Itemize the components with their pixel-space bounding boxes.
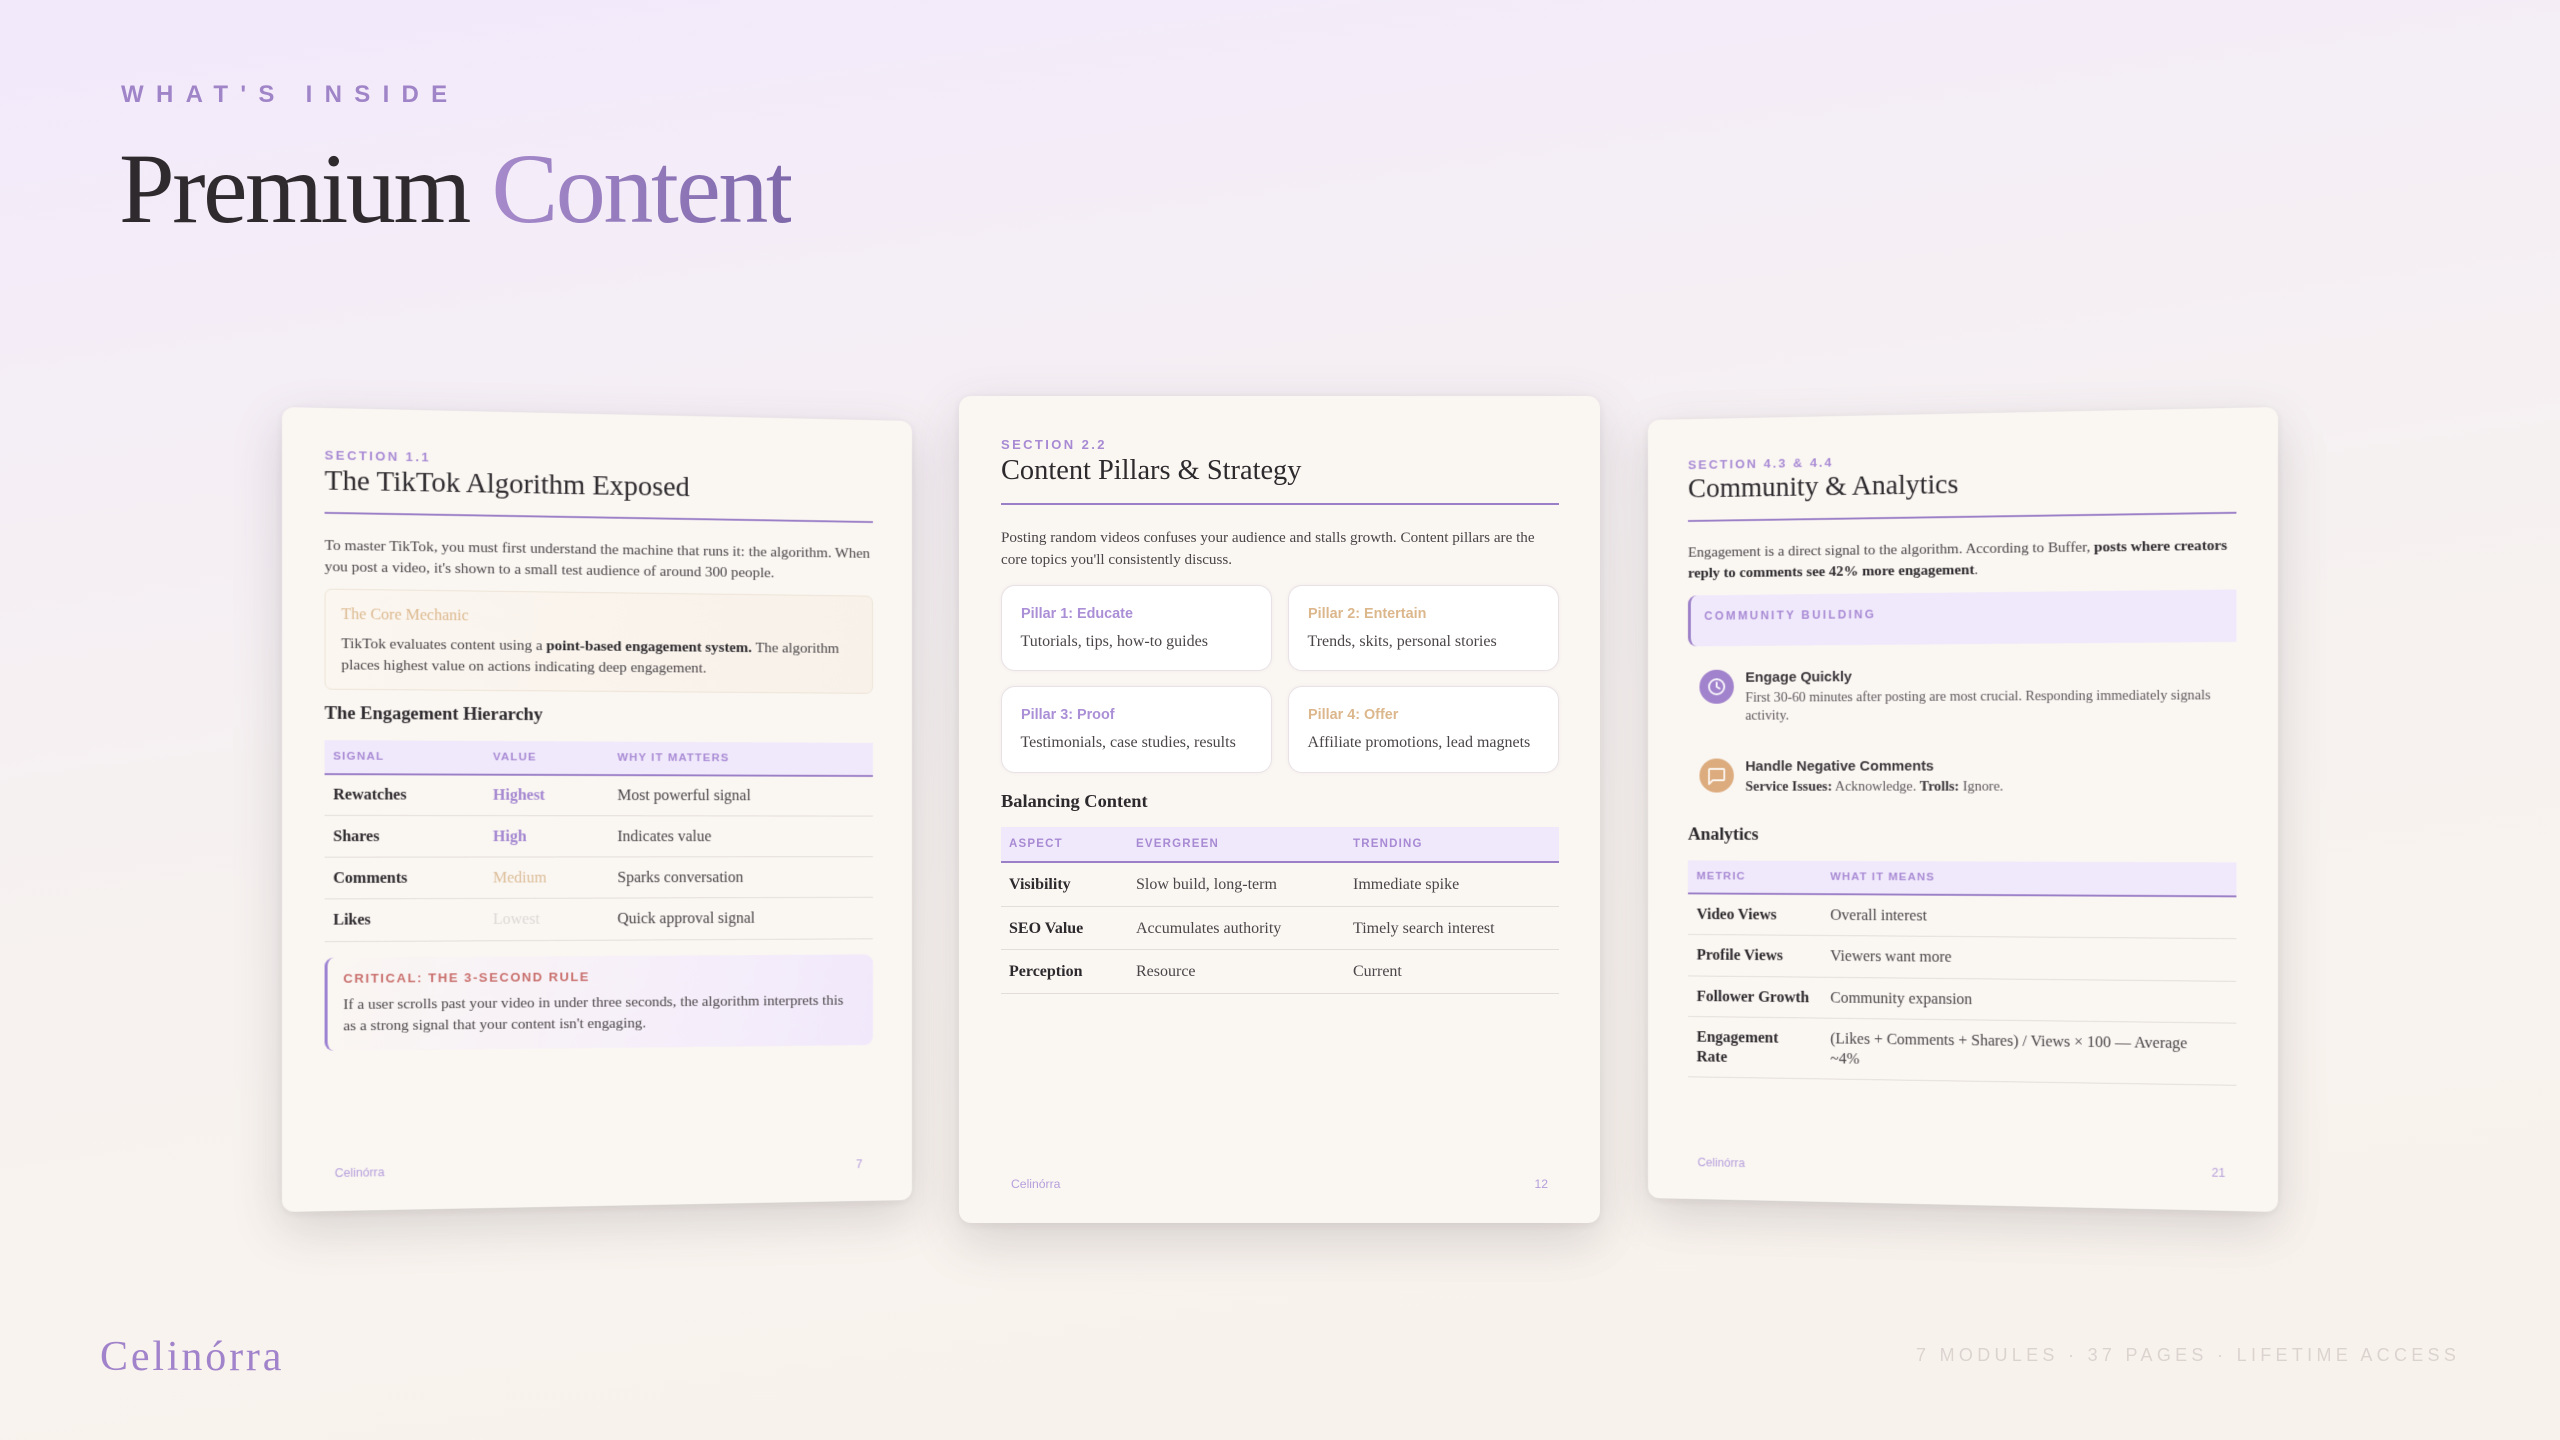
intro text: core topics you'll consistently discuss.	[1001, 551, 1232, 568]
intro text: To master TikTok, you must first understand the machine that runs it: the algorithm. When	[325, 537, 870, 561]
row: seo value: Timely search interest	[1353, 920, 1495, 937]
panel: page 21 community and analytics	[1648, 407, 2278, 1212]
intro text	[1688, 537, 2228, 582]
row: comments: Comments	[333, 870, 407, 887]
intro text: Posting random videos confuses your audience and stalls growth. Content pillars are the	[1001, 528, 1535, 546]
row: seo value: SEO Value	[1009, 920, 1083, 937]
footer logo: Celinórra	[100, 1334, 284, 1380]
row: engagement rate	[1688, 1016, 2236, 1085]
row: perception	[1001, 950, 1559, 994]
intro text	[324, 537, 870, 581]
panel: page 12 content pillars	[959, 396, 1600, 1223]
row: visibility	[1001, 863, 1559, 907]
row: likes: Quick approval signal	[617, 910, 755, 927]
card: pillar 2: Trends, skits, personal stories	[1308, 633, 1497, 650]
banner label: COMMUNITY BUILDING	[1704, 608, 1876, 623]
tip text: engage quickly: activity.	[1745, 708, 1789, 723]
section label: SECTION 2.2	[1001, 436, 1107, 452]
card: pillar 3: Pillar 3: Proof	[1021, 707, 1115, 723]
card: pillar 4: Affiliate promotions, lead magnets	[1308, 734, 1530, 751]
table header	[1001, 827, 1559, 863]
row: likes: Likes	[333, 912, 371, 929]
callout body: places highest value on actions indicating deep engagement.	[341, 657, 706, 676]
table header: ASPECT	[1009, 838, 1063, 850]
subheading: balancing content: Balancing Content	[1001, 791, 1148, 811]
card: pillar 1: Tutorials, tips, how-to guides	[1020, 633, 1208, 650]
row: rewatches	[325, 774, 873, 817]
row: visibility: Slow build, long-term	[1136, 876, 1277, 893]
row: profile views	[1688, 934, 2236, 981]
page heading: The TikTok Algorithm Exposed	[325, 465, 690, 503]
card: pillar 4: Pillar 4: Offer	[1308, 707, 1398, 723]
callout label: CRITICAL: THE 3-SECOND RULE	[343, 970, 590, 986]
card: pillar 4	[1288, 686, 1559, 773]
page heading: Content Pillars & Strategy	[1001, 455, 1301, 486]
table header: TRENDING	[1353, 838, 1423, 850]
footer brand: Celinórra	[1698, 1156, 1745, 1170]
callout title: The Core Mechanic	[341, 606, 469, 624]
row: follower growth	[1688, 976, 2236, 1023]
table header: EVERGREEN	[1136, 838, 1219, 850]
card: pillar 3: Testimonials, case studies, results	[1020, 734, 1236, 751]
subheading: engagement hierarchy: The Engagement Hierarchy	[325, 703, 543, 724]
row: engagement rate: ~4%	[1830, 1050, 1859, 1067]
page number: 7	[856, 1158, 862, 1171]
callout text	[343, 992, 844, 1035]
row: profile views: Viewers want more	[1830, 948, 1952, 965]
card: pillar 1	[1001, 585, 1272, 671]
callout text: If a user scrolls past your video in under three seconds, the algorithm interprets this	[343, 992, 843, 1013]
section label: SECTION 1.1	[325, 447, 431, 464]
card: pillar 1: Pillar 1: Educate	[1021, 606, 1133, 622]
callout: 3-second rule	[325, 954, 873, 1051]
row: rewatches: Rewatches	[333, 787, 407, 803]
section label: SECTION 4.3 & 4.4	[1688, 455, 1834, 472]
table header: WHY IT MATTERS	[617, 752, 729, 764]
callout text: as a strong signal that your content isn't engaging.	[343, 1015, 646, 1035]
row: comments: Sparks conversation	[617, 870, 743, 886]
title: Premium Content	[119, 133, 791, 244]
table header: VALUE	[493, 752, 537, 763]
page number: 12	[1534, 1177, 1548, 1191]
row: visibility: Immediate spike	[1353, 876, 1459, 893]
row: seo value	[1001, 907, 1559, 950]
callout body: TikTok evaluates content using a point-based engagement system. The algorithm	[341, 635, 839, 657]
footer tagline: 7 MODULES · 37 PAGES · LIFETIME ACCESS	[1916, 1345, 2460, 1365]
table header	[1688, 860, 2236, 897]
row: rewatches: Highest	[493, 787, 545, 804]
callout body	[340, 635, 840, 676]
row: perception: Perception	[1009, 963, 1082, 980]
card: pillar 2	[1288, 585, 1559, 671]
row: profile views: Profile Views	[1697, 947, 1783, 964]
row: seo value: Accumulates authority	[1136, 920, 1281, 937]
table header: WHAT IT MEANS	[1830, 871, 1935, 883]
table header	[325, 740, 873, 777]
eyebrow: what's inside: WHAT'S INSIDE	[121, 81, 460, 108]
footer brand: Celinórra	[1011, 1177, 1060, 1191]
row: comments: Medium	[493, 870, 547, 886]
row: engagement rate: Engagement	[1697, 1029, 1778, 1046]
panel: page 7 algorithm	[282, 407, 912, 1212]
icon: clock	[1699, 670, 1734, 704]
footer brand: Celinórra	[335, 1166, 384, 1180]
row: comments	[325, 857, 873, 899]
row: likes	[325, 898, 873, 942]
icon: chat bubble	[1699, 759, 1734, 793]
tip text: engage quickly	[1745, 688, 2211, 723]
row: video views: Video Views	[1697, 907, 1777, 923]
page heading: Community & Analytics	[1688, 470, 1958, 504]
banner: community building	[1688, 589, 2236, 646]
row: follower growth: Community expansion	[1830, 990, 1972, 1007]
heading underline	[325, 512, 873, 523]
intro text	[1001, 528, 1535, 568]
row: shares: High	[493, 829, 527, 845]
row: shares: Indicates value	[617, 829, 712, 845]
tip text: engage quickly: First 30-60 minutes after posting are most crucial. Responding immediately signals	[1745, 688, 2211, 706]
tip text: negative comments: Service Issues: Acknowledge. Trolls: Ignore.	[1745, 779, 2003, 794]
row: visibility: Visibility	[1009, 876, 1071, 893]
row: shares: Shares	[333, 829, 379, 845]
intro text: you post a video, it's shown to a small test audience of around 300 people.	[325, 558, 774, 581]
row: engagement rate: Rate	[1697, 1049, 1727, 1065]
tip title: negative comments: Handle Negative Comments	[1745, 759, 1934, 774]
card: pillar 3	[1001, 686, 1272, 773]
card: pillar 2: Pillar 2: Entertain	[1308, 606, 1426, 622]
row: engagement rate: (Likes + Comments + Shares) / Views × 100 — Average	[1830, 1031, 2187, 1052]
intro text: Engagement is a direct signal to the algorithm. According to Buffer, posts where creators	[1688, 537, 2227, 561]
row: perception: Resource	[1136, 963, 1196, 980]
subheading: analytics: Analytics	[1688, 825, 1758, 844]
tip title: engage quickly: Engage Quickly	[1745, 669, 1852, 685]
page number: 21	[2212, 1166, 2225, 1180]
intro text: reply to comments see 42% more engagement.	[1688, 562, 1978, 582]
callout: core mechanic	[325, 589, 873, 694]
row: follower growth: Follower Growth	[1697, 988, 1809, 1006]
row: video views: Overall interest	[1830, 907, 1927, 924]
row: video views	[1688, 894, 2236, 939]
row: perception: Current	[1353, 963, 1402, 980]
table header: METRIC	[1697, 871, 1746, 882]
row: rewatches: Most powerful signal	[617, 788, 751, 804]
heading underline	[1001, 503, 1559, 505]
row: shares	[325, 816, 873, 858]
row: likes: Lowest	[493, 911, 540, 928]
table header: SIGNAL	[333, 751, 384, 763]
heading underline	[1688, 512, 2236, 522]
